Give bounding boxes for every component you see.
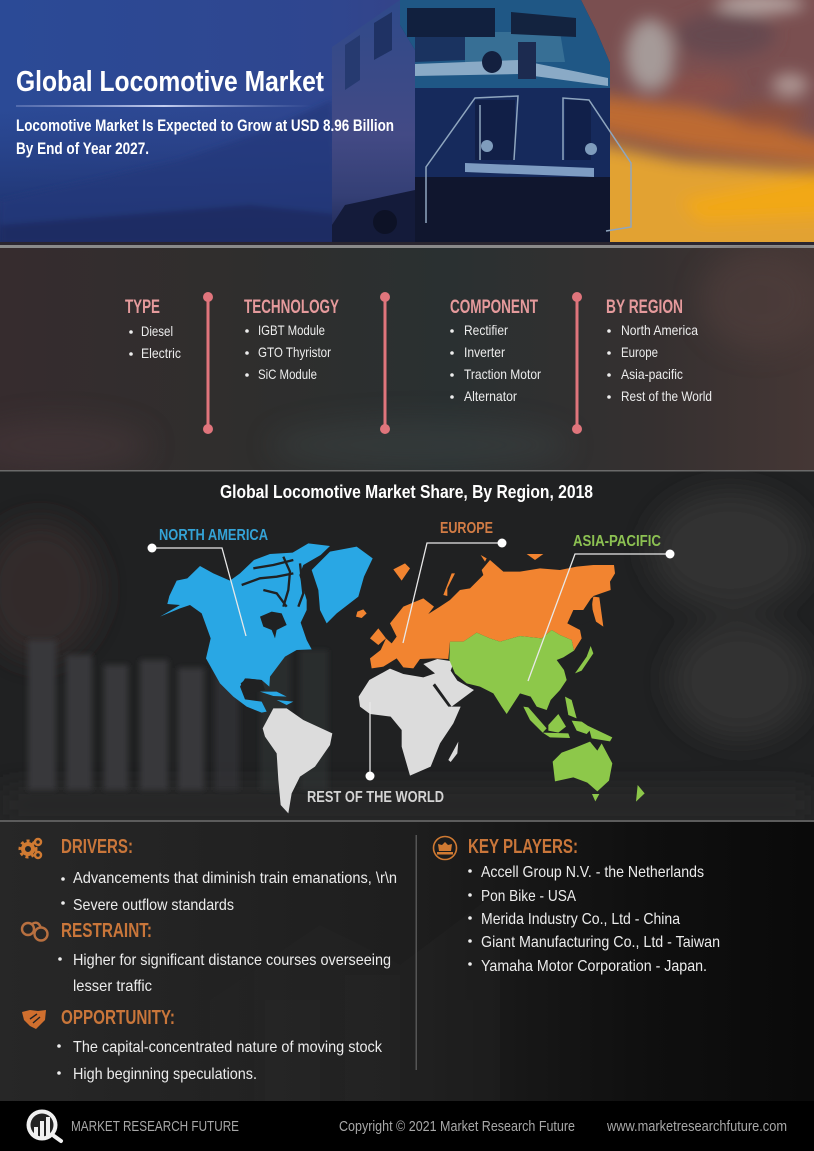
train side xyxy=(332,58,415,224)
subtitle: By End of Year 2027. xyxy=(16,140,149,158)
label: asia-pacific: ASIA-PACIFIC xyxy=(573,533,661,550)
sea of okhotsk xyxy=(567,597,593,625)
footer xyxy=(0,1101,814,1151)
column: component: Rectifier xyxy=(464,322,508,338)
opportunity list: High beginning speculations. xyxy=(73,1066,257,1083)
key players list: Accell Group N.V. - the Netherlands xyxy=(481,864,704,881)
key players list: Yamaha Motor Corporation - Japan. xyxy=(481,958,707,975)
copyright: Copyright © 2021 Market Research Future xyxy=(339,1118,575,1135)
subtitle: Locomotive Market Is Expected to Grow at USD 8.96 Billion xyxy=(16,117,394,135)
icon: key players xyxy=(434,836,456,860)
restraint list: lesser traffic xyxy=(73,978,152,995)
brand name: MARKET RESEARCH FUTURE xyxy=(71,1118,239,1135)
key players list: Pon Bike - USA xyxy=(481,888,576,905)
hudson bay xyxy=(260,612,287,638)
heading: key players: KEY PLAYERS: xyxy=(468,836,578,858)
divider: technology/component xyxy=(380,292,390,434)
column: type: Diesel xyxy=(141,323,173,339)
sunset sky xyxy=(581,0,814,242)
locomotive front xyxy=(400,0,610,177)
key players list: Merida Industry Co., Ltd - China xyxy=(481,911,680,928)
heading: restraint: RESTRAINT: xyxy=(61,920,152,942)
map: asia-pacific xyxy=(449,630,645,802)
column: technology xyxy=(244,297,339,382)
column: component: Alternator xyxy=(464,388,517,404)
divider: component/region xyxy=(572,292,582,434)
heading: opportunity: OPPORTUNITY: xyxy=(61,1007,175,1029)
key players list xyxy=(468,864,720,975)
column: technology: SiC Module xyxy=(258,366,317,382)
front steps and platform xyxy=(415,177,610,245)
drivers list: Advancements that diminish train emanations, \r\n xyxy=(73,870,397,887)
panel: market dynamics xyxy=(0,820,814,1101)
opportunity list xyxy=(57,1039,383,1083)
label: europe xyxy=(403,520,506,643)
label: europe: EUROPE xyxy=(440,520,493,537)
column: component: COMPONENT xyxy=(450,297,538,318)
map: africa and middle east xyxy=(359,659,474,776)
column: by region: North America xyxy=(621,322,698,338)
restraint list: Higher for significant distance courses overseeing xyxy=(73,952,391,969)
subtitle xyxy=(16,117,394,158)
icon: handshake xyxy=(22,1010,46,1029)
divider: type/technology xyxy=(203,292,213,434)
icon: logo xyxy=(26,1110,61,1141)
drivers list xyxy=(61,870,397,914)
panel: segmentation xyxy=(0,245,814,470)
column: type xyxy=(125,297,181,361)
heading: drivers: DRIVERS: xyxy=(61,836,133,858)
column: technology: GTO Thyristor xyxy=(258,344,331,360)
column: technology: IGBT Module xyxy=(258,322,325,338)
icon: handcuffs xyxy=(22,923,48,940)
column: by region: BY REGION xyxy=(606,297,683,318)
website: www.marketresearchfuture.com xyxy=(606,1118,787,1135)
label: asia-pacific xyxy=(528,533,674,681)
gulf of mexico xyxy=(241,678,265,695)
map heading: Global Locomotive Market Share, By Region, 2018 xyxy=(220,482,593,502)
column: component: Inverter xyxy=(464,344,505,360)
label: north america: NORTH AMERICA xyxy=(159,527,268,544)
title: Global Locomotive Market xyxy=(16,66,324,98)
column: by region: Asia-pacific xyxy=(621,366,683,382)
label: rest of the world xyxy=(307,702,444,806)
map: europe and russia xyxy=(356,554,615,668)
handrails xyxy=(426,96,631,231)
column: type: TYPE xyxy=(125,297,160,318)
column: by region xyxy=(606,297,712,404)
column: by region: Europe xyxy=(621,344,658,360)
opportunity list: The capital-concentrated nature of moving stock xyxy=(73,1039,383,1056)
panel: regional map xyxy=(0,470,814,821)
column: component xyxy=(450,297,541,404)
icon: gears xyxy=(20,839,41,858)
train carriages xyxy=(28,103,332,228)
title rule xyxy=(16,105,312,107)
wheels xyxy=(373,210,397,234)
label: north america xyxy=(148,527,268,636)
column: component: Traction Motor xyxy=(464,366,541,382)
map: north america xyxy=(160,543,373,713)
headlights xyxy=(481,140,493,152)
hero banner xyxy=(0,0,814,245)
label: rest of the world: REST OF THE WORLD xyxy=(307,789,444,806)
column: technology: TECHNOLOGY xyxy=(244,297,339,318)
map: south america xyxy=(263,708,332,813)
restraint list xyxy=(58,952,391,995)
key players list: Giant Manufacturing Co., Ltd - Taiwan xyxy=(481,934,720,951)
column: by region: Rest of the World xyxy=(621,388,712,404)
drivers list: Severe outflow standards xyxy=(73,897,234,914)
arctic channels xyxy=(242,557,303,607)
column: type: Electric xyxy=(141,345,181,361)
